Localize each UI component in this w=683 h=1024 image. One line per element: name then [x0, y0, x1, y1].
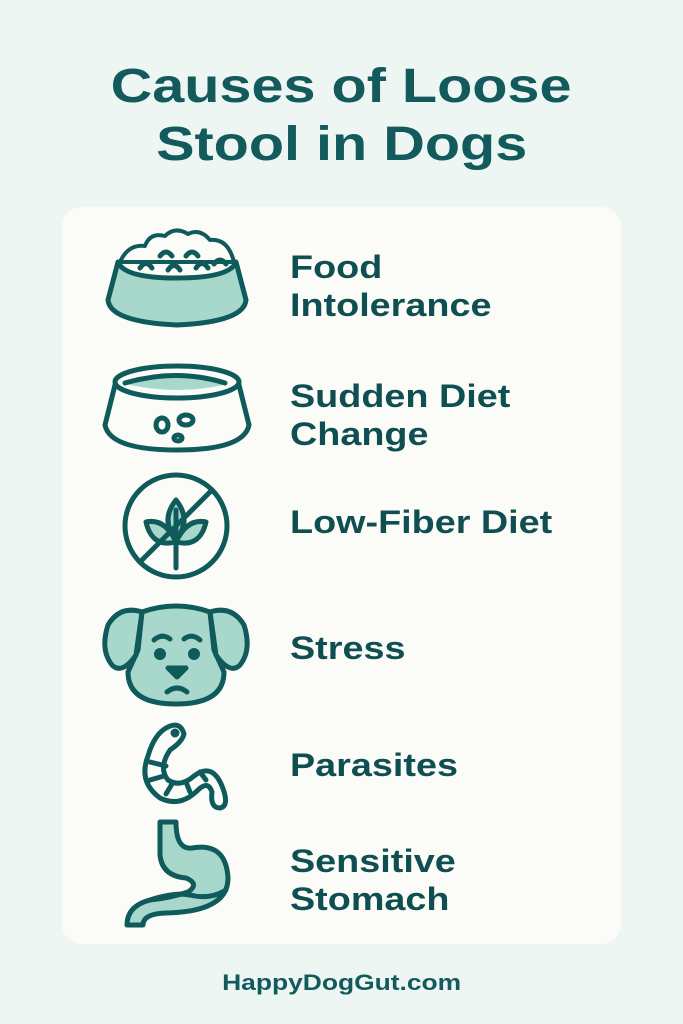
- label: sensitive stomach: Sensitive: [290, 843, 456, 879]
- label: food intolerance: Intolerance: [290, 287, 491, 323]
- icon: empty bowl: [105, 366, 249, 450]
- label: parasites: Parasites: [290, 747, 458, 783]
- label: sensitive stomach: Stomach: [290, 881, 449, 917]
- label: sudden diet change: [290, 378, 510, 452]
- icon: food bowl: [108, 230, 246, 325]
- icon: no fiber: [125, 475, 227, 577]
- panel: causes: [62, 207, 621, 944]
- label: sudden diet change: Change: [290, 416, 428, 452]
- label: low-fiber diet: Low-Fiber Diet: [290, 504, 552, 540]
- title: Causes of Loose: [111, 60, 572, 113]
- icon: stomach: [127, 822, 228, 925]
- label: sudden diet change: Sudden Diet: [290, 378, 510, 414]
- icon: worm: [145, 725, 226, 808]
- title: Stool in Dogs: [156, 118, 527, 171]
- label: stress: Stress: [290, 630, 405, 666]
- label: food intolerance: Food: [290, 249, 382, 285]
- title: [111, 60, 572, 171]
- footer: HappyDogGut.com: [222, 970, 461, 995]
- label: food intolerance: [290, 249, 491, 323]
- icon: stressed dog: [105, 606, 247, 704]
- label: sensitive stomach: [290, 843, 456, 917]
